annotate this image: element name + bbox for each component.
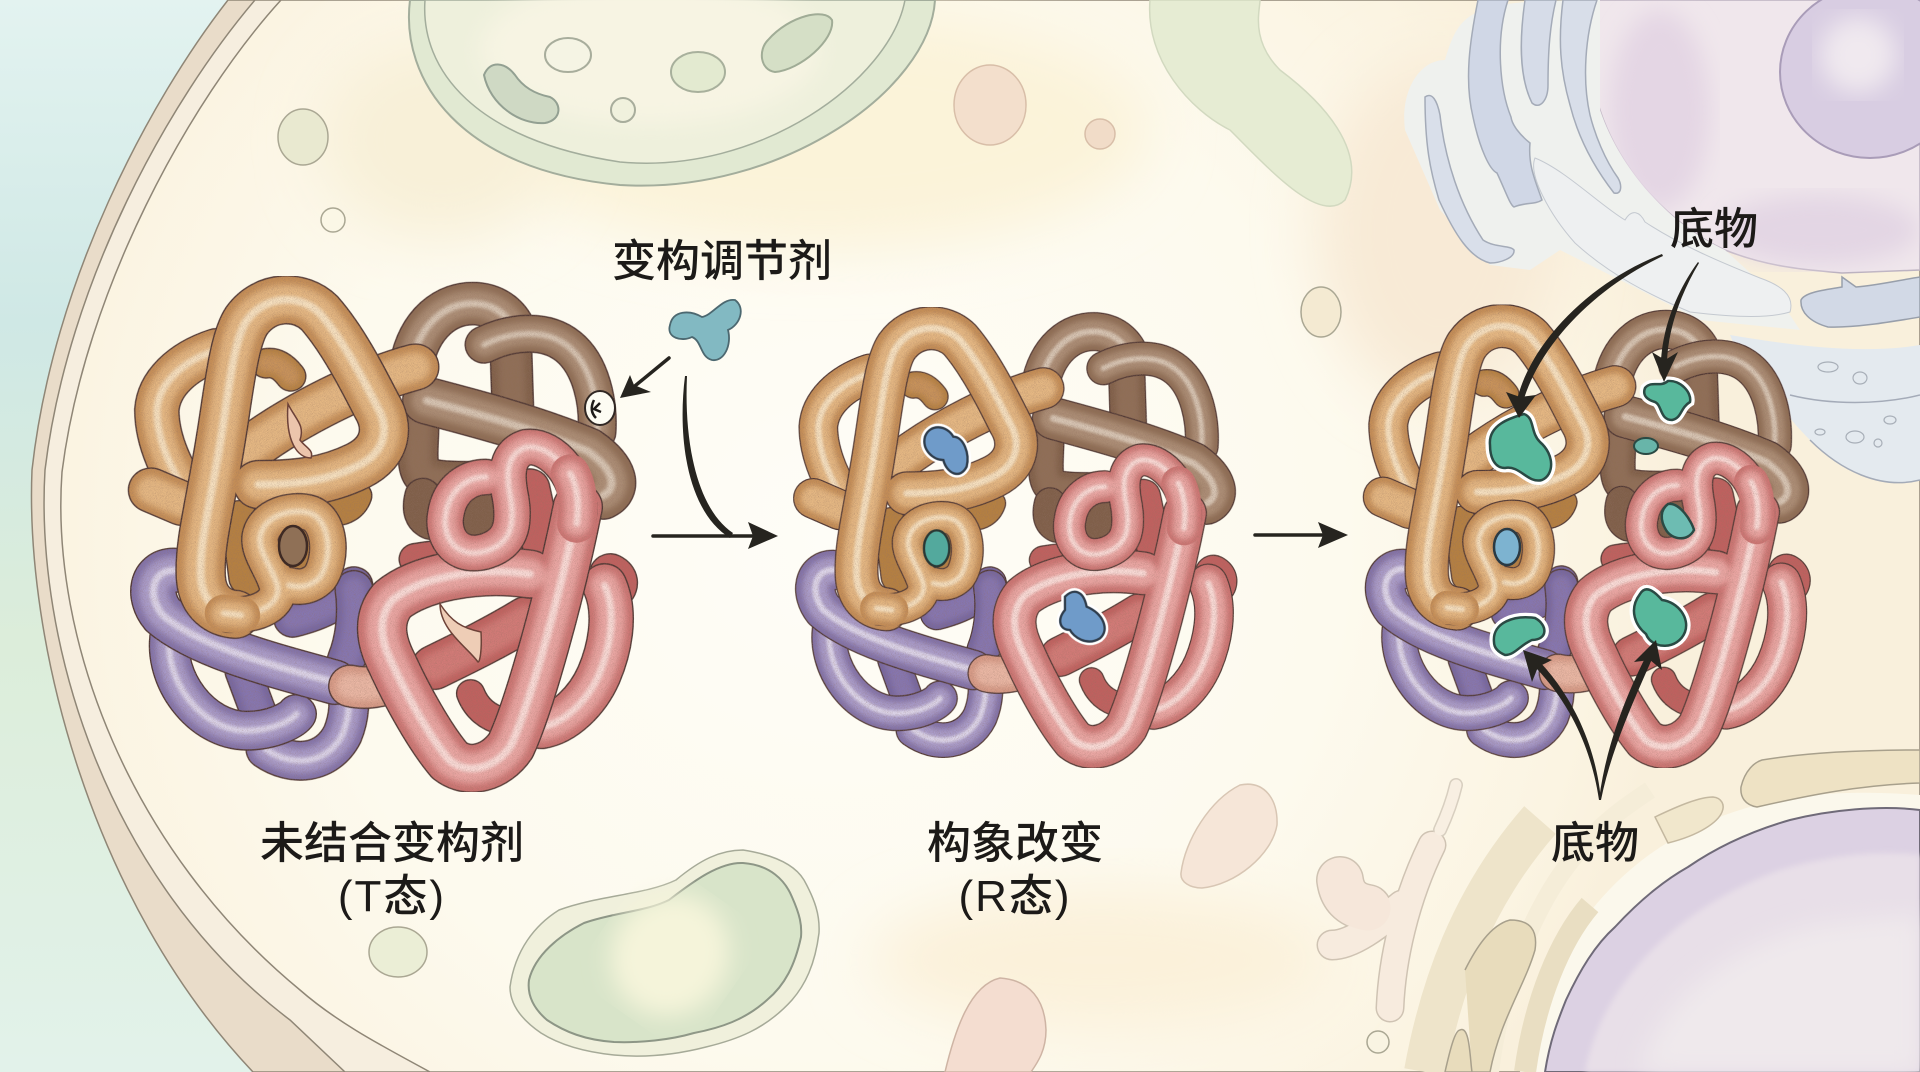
teal oval [1662, 504, 1694, 538]
arrows: lower substrate label [1523, 640, 1662, 800]
substrates, bound [1490, 381, 1694, 655]
nucleus bottom right [1520, 793, 1920, 1072]
small teal [1634, 438, 1658, 454]
ER bubbles [1815, 362, 1896, 447]
label: substrate top: 底物 [1670, 205, 1758, 254]
protein: T state tetramer [151, 300, 617, 768]
cisterna E [1534, 158, 1791, 316]
label: substrate bottom: 底物 [1551, 819, 1639, 868]
label: T state line 2: (T态) [338, 872, 446, 921]
vesicle small [611, 98, 635, 122]
nucleus top right [1592, 0, 1920, 273]
rough ER: tan cisternae [1425, 750, 1920, 1072]
blue regulator, orange subunit [924, 427, 968, 474]
arrows: upper substrate label [1506, 254, 1699, 418]
blue regulator, red subunit [1060, 592, 1105, 641]
arrow: to substrate state [1255, 522, 1348, 548]
endoplasmic reticulum: blue cisternae [1404, 0, 1920, 483]
organelle: bottom green mitochondrion [510, 850, 819, 1056]
vesicle [545, 38, 591, 72]
tubule [1445, 920, 1536, 1072]
tan cleft, orange subunit [288, 404, 312, 458]
protein: R state tetramer [813, 328, 1219, 747]
inner bean right [762, 14, 832, 72]
tan cleft, red subunit [440, 604, 481, 662]
substrate A [1490, 414, 1551, 481]
interior colour washes [320, 10, 1560, 1030]
allosteric pocket [585, 391, 615, 425]
peach ER tubules [1332, 785, 1456, 1008]
blue lower sheet [1730, 335, 1920, 483]
teal oval [924, 530, 949, 566]
ER pale sheet [1404, 0, 1800, 330]
cisterna C [1521, 0, 1556, 105]
label: conformational change: 构象改变 [927, 819, 1103, 868]
substrate C [1494, 617, 1544, 655]
label: allosteric modulator: 变构调节剂 [612, 237, 832, 286]
label: T state: 未结合变构剂 [260, 819, 524, 868]
blue oval [1494, 529, 1520, 565]
icon: allosteric modulator molecule [669, 300, 741, 360]
vesicle mid [671, 52, 725, 92]
substrate D [1634, 589, 1686, 646]
arrow: curved modulator binding [653, 376, 778, 549]
substrate B [1644, 381, 1690, 420]
organelle: top green mitochondrion [409, 0, 935, 186]
brown oval, orange curl [279, 526, 307, 566]
inner bean left [484, 64, 558, 123]
cisterna F [1801, 277, 1920, 327]
cisterna D [1560, 0, 1621, 193]
label: R state: (R态) [958, 872, 1072, 921]
cisterna B [1469, 0, 1542, 207]
organelle: right green mitochondrion [1150, 0, 1352, 206]
arrow: modulator to pocket [620, 358, 669, 398]
protein: substrate-bound tetramer [1383, 326, 1792, 747]
small vesicles [278, 65, 1389, 1072]
cisterna A [1425, 96, 1514, 263]
